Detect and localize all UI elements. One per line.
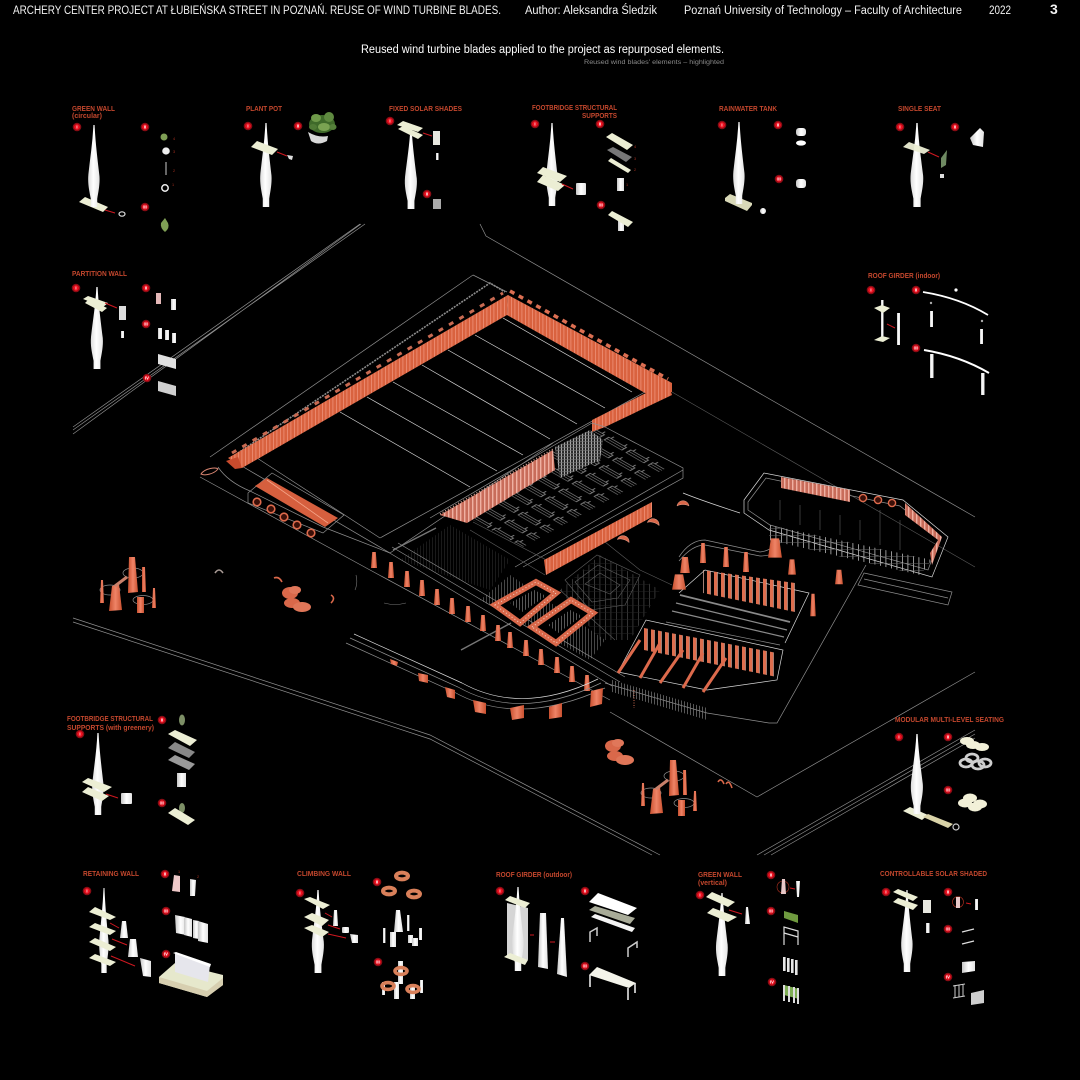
green strips assembled [783, 985, 799, 1004]
blade [312, 890, 324, 973]
subtitle: Reused wind turbine blades applied to the project as repurposed elements. [361, 44, 724, 56]
arrow [562, 184, 573, 189]
assembled seats [958, 794, 987, 812]
markers: II [376, 880, 378, 884]
cut blade parts [120, 921, 151, 977]
markers: III [376, 960, 380, 964]
assembled support [608, 211, 633, 231]
markers [896, 123, 959, 131]
markers: II [947, 734, 949, 740]
south blade cluster [641, 760, 697, 816]
markers: I [389, 118, 391, 124]
exploded layers: 1 [626, 183, 628, 187]
markers: III [144, 322, 148, 326]
subheading: (vertical) [698, 878, 728, 887]
ring [953, 824, 959, 830]
markers: III [946, 788, 950, 792]
blade [901, 890, 913, 972]
blade [260, 123, 272, 207]
arrow [928, 152, 939, 157]
heading: RETAINING WALL [83, 869, 140, 878]
panel: partition wall [72, 269, 176, 396]
small arcs [215, 570, 732, 788]
heading line 2: SUPPORTS [582, 111, 617, 120]
exploded components: 4 [173, 137, 175, 141]
cut parts [333, 910, 358, 943]
panel: controllable solar shaded [880, 869, 987, 1005]
element parts [172, 870, 199, 896]
author: Author: Aleksandra Śledzik [525, 4, 657, 17]
blade [733, 122, 745, 204]
element parts: 1 [178, 870, 180, 874]
plates [893, 889, 918, 910]
panel: footbridge structural supports [531, 103, 636, 231]
ring [119, 212, 125, 216]
heading: MODULAR MULTI-LEVEL SEATING [895, 715, 1004, 724]
plates [397, 121, 423, 139]
exploded layers [168, 714, 197, 787]
second red blade wall [544, 502, 652, 575]
panel: plant pot [244, 104, 336, 207]
panel: climbing wall [296, 869, 423, 999]
panel: single seat [896, 104, 984, 207]
heading: GREEN WALL [72, 104, 116, 113]
markers: I [79, 732, 81, 736]
markers [496, 887, 589, 970]
exploded components: 2 [173, 169, 175, 173]
arrow [105, 210, 115, 213]
exploded columns [383, 910, 422, 947]
markers [76, 716, 166, 807]
stick part [436, 153, 438, 160]
markers: IV [770, 980, 774, 984]
small part [121, 331, 124, 338]
wall group [175, 915, 208, 943]
markers: II [161, 718, 163, 722]
plates [83, 296, 108, 312]
panel part [923, 900, 931, 913]
exploded layers [589, 893, 637, 957]
diagonal roof beams [618, 640, 726, 692]
markers [83, 870, 170, 958]
strips [783, 957, 798, 975]
assembled support [168, 803, 195, 825]
blade [405, 128, 417, 209]
blade [716, 893, 728, 976]
arrows [110, 923, 135, 966]
plates [903, 807, 953, 828]
markers: II [297, 124, 299, 128]
blade [92, 733, 104, 815]
markers: I [75, 286, 77, 290]
west seating blobs [282, 586, 311, 612]
markers [696, 871, 776, 986]
markers: III [946, 926, 950, 932]
blade [91, 287, 103, 369]
markers: III [599, 202, 603, 208]
element parts: 2 [197, 875, 199, 879]
source pieces [777, 879, 800, 897]
cylinder [576, 183, 586, 195]
exploded components: 1 [172, 183, 174, 187]
plant with pot [308, 112, 336, 144]
green panel [941, 150, 947, 168]
plates [304, 897, 330, 937]
ring elements [253, 498, 315, 537]
markers: IV [164, 952, 168, 956]
markers [296, 878, 382, 966]
heading: SINGLE SEAT [898, 104, 942, 113]
heading: PARTITION WALL [72, 269, 128, 278]
tank parts [796, 128, 806, 188]
source pieces [952, 896, 978, 910]
markers [386, 117, 431, 198]
exploded parts [156, 293, 176, 396]
markers: II [770, 872, 772, 878]
markers: I [899, 124, 901, 130]
plates [82, 778, 112, 801]
front row of blade columns [371, 552, 590, 691]
panel: rainwater tank [718, 104, 806, 214]
heading: RAINWATER TANK [719, 104, 778, 113]
plate [251, 141, 278, 155]
markers: III [777, 176, 781, 182]
ring [760, 208, 766, 214]
arrows [530, 935, 555, 942]
rings [960, 754, 991, 769]
assembled girder [924, 350, 989, 395]
base plate [725, 194, 752, 211]
markers: III [143, 204, 147, 210]
shade square [433, 199, 441, 209]
floor bands [666, 595, 790, 645]
site boundary lines [73, 224, 975, 855]
panel part [119, 306, 126, 320]
markers: I [86, 888, 88, 894]
markers: I [898, 734, 900, 740]
main field with target lines [235, 283, 645, 553]
heading: ROOF GIRDER (outdoor) [496, 870, 573, 879]
plates [504, 896, 530, 965]
markers: II [584, 888, 586, 894]
stick part [926, 923, 930, 933]
panel: footbridge supports with greenery [67, 714, 197, 825]
markers: III [160, 800, 164, 806]
markers: II [164, 872, 166, 876]
ramp [858, 573, 952, 605]
markers: I [699, 892, 701, 898]
cut part [745, 907, 750, 924]
markers [72, 284, 151, 382]
legend note: Reused wind blades' elements – highlighted [584, 59, 724, 66]
markers: IV [946, 974, 950, 980]
orange holds [383, 873, 420, 897]
assembled columns [382, 961, 423, 999]
arrows [325, 913, 346, 938]
arrow [105, 303, 117, 308]
markers [718, 121, 783, 183]
markers [73, 123, 149, 211]
blade [88, 125, 100, 207]
markers: I [870, 288, 872, 292]
south seating blobs [605, 739, 634, 765]
leaf elements by hall [617, 501, 689, 542]
exploded layers: 3 [634, 157, 636, 161]
girder panel [507, 903, 528, 960]
plates [89, 907, 116, 966]
panel: green wall vertical [696, 870, 800, 1004]
central hall with seating rows [388, 423, 683, 686]
markers: I [885, 890, 887, 894]
markers: II [915, 288, 917, 292]
heading: FOOTBRIDGE STRUCTURAL [67, 714, 154, 723]
shade rails [953, 984, 984, 1005]
project title: ARCHERY CENTER PROJECT AT ŁUBIEŃSKA STREET IN POZNAŃ. REUSE OF WIND TURBINE BLADES. [13, 4, 501, 17]
blade [546, 123, 558, 206]
curved footbridge [346, 634, 605, 720]
green panel [784, 911, 798, 923]
arrow [887, 324, 895, 328]
panel: roof girder indoor [867, 271, 989, 395]
site plan isometric [73, 224, 975, 855]
plates [706, 892, 737, 922]
frame [784, 927, 798, 945]
small seat [940, 174, 944, 178]
markers: IV [145, 376, 149, 380]
assembled bench [589, 967, 636, 1000]
small pot [287, 155, 293, 160]
markers: I [247, 124, 249, 128]
markers: III [769, 908, 773, 914]
markers: II [145, 286, 147, 290]
markers [895, 733, 952, 794]
markers: III [164, 908, 168, 914]
arrow [729, 910, 742, 914]
markers: I [299, 890, 301, 896]
markers [867, 286, 920, 352]
red blade wall around field [201, 291, 672, 475]
panel: green wall circular [72, 104, 175, 232]
heading: FOOTBRIDGE STRUCTURAL [532, 103, 618, 112]
exploded components: 3 [173, 150, 175, 154]
page number: 3 [1050, 1, 1058, 17]
heading: PLANT POT [246, 104, 283, 113]
base plate [79, 197, 108, 212]
markers: I [721, 122, 723, 128]
heading line 2: SUPPORTS (with greenery) [67, 723, 155, 732]
panel part [433, 131, 440, 145]
plates [537, 167, 567, 191]
heading: GREEN WALL [698, 870, 743, 879]
west blade cluster [100, 557, 156, 613]
wall on plinth [159, 952, 223, 997]
cut blade parts [538, 913, 567, 977]
markers: II [144, 124, 146, 130]
markers: I [76, 124, 78, 130]
panel: roof girder outdoor [496, 870, 637, 1000]
heading: CLIMBING WALL [297, 869, 352, 878]
panel: modular multi-level seating [895, 715, 1004, 830]
west pavilion with red plate and rings [200, 467, 610, 700]
exploded layers: 4 [634, 145, 636, 149]
arrow [106, 794, 118, 798]
panel: fixed solar shades [386, 104, 462, 209]
footbridge blade pieces [390, 659, 603, 720]
blade [512, 887, 524, 971]
arrow [277, 152, 287, 156]
markers [882, 888, 952, 981]
markers: II [426, 192, 428, 196]
markers: III [583, 964, 587, 968]
markers: II [777, 122, 779, 128]
markers [244, 122, 302, 130]
seat tops [960, 737, 989, 751]
heading: CONTROLLABLE SOLAR SHADED [880, 869, 987, 878]
plaza with sports blocks [605, 493, 866, 723]
plate [903, 142, 930, 154]
blade part [897, 313, 900, 345]
heading: FIXED SOLAR SHADES [389, 104, 462, 113]
markers [531, 120, 605, 209]
exploded components [160, 134, 175, 232]
exploded layers: 2 [634, 168, 636, 172]
markers: II [954, 124, 956, 130]
subheading: (circular) [72, 111, 103, 120]
arrow [423, 133, 432, 136]
exploded girder [923, 288, 988, 344]
heading: ROOF GIRDER (indoor) [868, 271, 941, 280]
shade block [962, 961, 975, 973]
courtyard frames [495, 582, 593, 643]
header bar [13, 1, 1058, 17]
cylinder [121, 793, 132, 804]
seat [970, 128, 984, 147]
panel: retaining wall [83, 869, 223, 997]
markers: II [947, 890, 949, 894]
exploded layers [606, 133, 636, 191]
markers: I [534, 122, 536, 126]
university: Poznań University of Technology – Faculty of Architecture [684, 5, 962, 17]
strips [962, 929, 974, 944]
plaza blade columns [672, 538, 843, 616]
column with plates [874, 300, 890, 342]
markers: III [914, 346, 918, 350]
blade [910, 123, 923, 207]
blade [911, 734, 923, 814]
blade [99, 888, 109, 973]
markers: II [599, 122, 601, 126]
north-east building [744, 473, 948, 577]
year: 2022 [989, 5, 1011, 17]
markers: I [499, 888, 501, 894]
